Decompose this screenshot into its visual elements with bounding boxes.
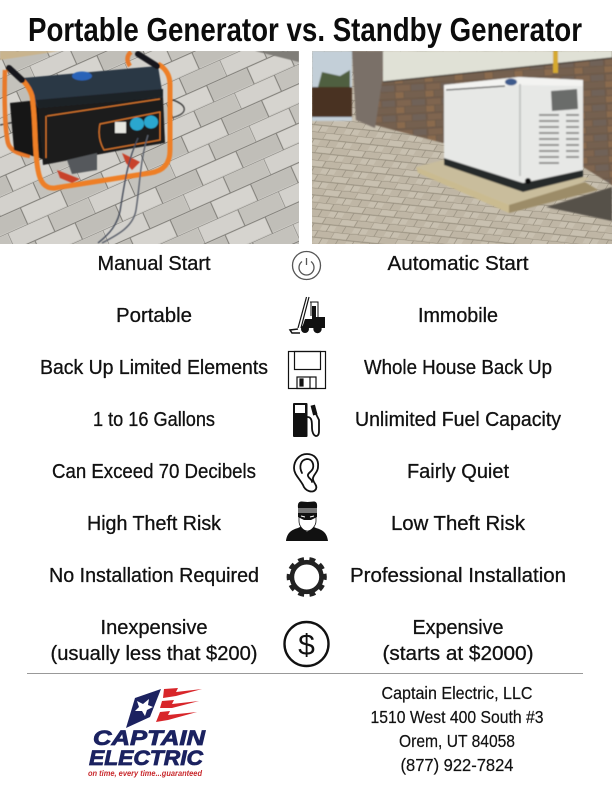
contact details: Captain Electric, LLC [382, 683, 532, 703]
logo flag [126, 688, 202, 728]
row: portable vs immobile: Portable [116, 305, 192, 327]
icon: ear [294, 454, 318, 492]
body top [23, 66, 163, 108]
row: manual vs automatic start [98, 252, 529, 280]
row: portable vs immobile [116, 297, 498, 333]
blue sockets [130, 118, 144, 130]
row: noise: Can Exceed 70 Decibels [52, 461, 256, 483]
row: cost: (starts at $2000) [382, 643, 534, 665]
body front [38, 97, 165, 165]
logo tagline: on time, every time...guaranteed [88, 769, 203, 778]
grips [138, 54, 157, 66]
row: cost: (usually less that $200) [50, 643, 258, 665]
row: cost: Inexpensive [100, 617, 208, 639]
logo: Captain Electric: ELECTRIC [89, 747, 204, 770]
row: backup coverage [40, 352, 552, 388]
photo: standby generator beside brick wall [312, 51, 612, 244]
row: portable vs immobile: Immobile [418, 305, 498, 327]
engine base [67, 153, 97, 174]
concrete slab [416, 160, 590, 207]
slab shadow [546, 187, 612, 221]
row: theft risk: Low Theft Risk [391, 513, 526, 535]
orange trim [46, 99, 160, 158]
row: fuel capacity: Unlimited Fuel Capacity [355, 409, 561, 431]
row: manual vs automatic start: Automatic Start [388, 253, 529, 275]
row: manual vs automatic start: Manual Start [98, 253, 211, 275]
row: noise: Fairly Quiet [407, 461, 509, 483]
row: cost [50, 617, 534, 666]
generator vent panel [551, 89, 578, 111]
icon: masked thief [286, 502, 328, 541]
row: theft risk: High Theft Risk [87, 513, 222, 535]
icon: dollar in circle [284, 622, 328, 666]
logo: Captain Electric [88, 688, 206, 778]
front frame [7, 64, 170, 188]
photo: portable generator on paving [0, 51, 299, 244]
row: noise [52, 454, 509, 492]
icon: floppy disk [288, 352, 326, 388]
row: backup coverage: Back Up Limited Elements [40, 357, 268, 379]
logo wordmark: CAPTAIN [93, 727, 206, 750]
row: installation [49, 556, 566, 598]
icon: dollar in circle: $ [298, 629, 315, 662]
red feet [57, 170, 80, 183]
generator housing [444, 77, 583, 192]
contact details: (877) 922-7824 [400, 755, 514, 775]
icon: forklift [290, 297, 325, 333]
contact details: Orem, UT 84058 [399, 731, 515, 751]
icon: fuel pump [293, 403, 319, 437]
body side [10, 100, 45, 160]
row: installation: Professional Installation [350, 565, 566, 587]
divider [27, 672, 583, 674]
cables [98, 138, 138, 243]
row: fuel capacity [93, 403, 561, 437]
row: installation: No Installation Required [49, 565, 259, 587]
row: fuel capacity: 1 to 16 Gallons [93, 409, 215, 431]
rear frame [5, 70, 30, 156]
icon: gear [286, 556, 328, 598]
contact details [370, 683, 544, 775]
contact details: 1510 West 400 South #3 [370, 707, 544, 727]
row: cost: Expensive [412, 617, 504, 639]
row: theft risk [87, 502, 526, 541]
icon: power button [292, 252, 320, 280]
row: backup coverage: Whole House Back Up [364, 357, 552, 379]
